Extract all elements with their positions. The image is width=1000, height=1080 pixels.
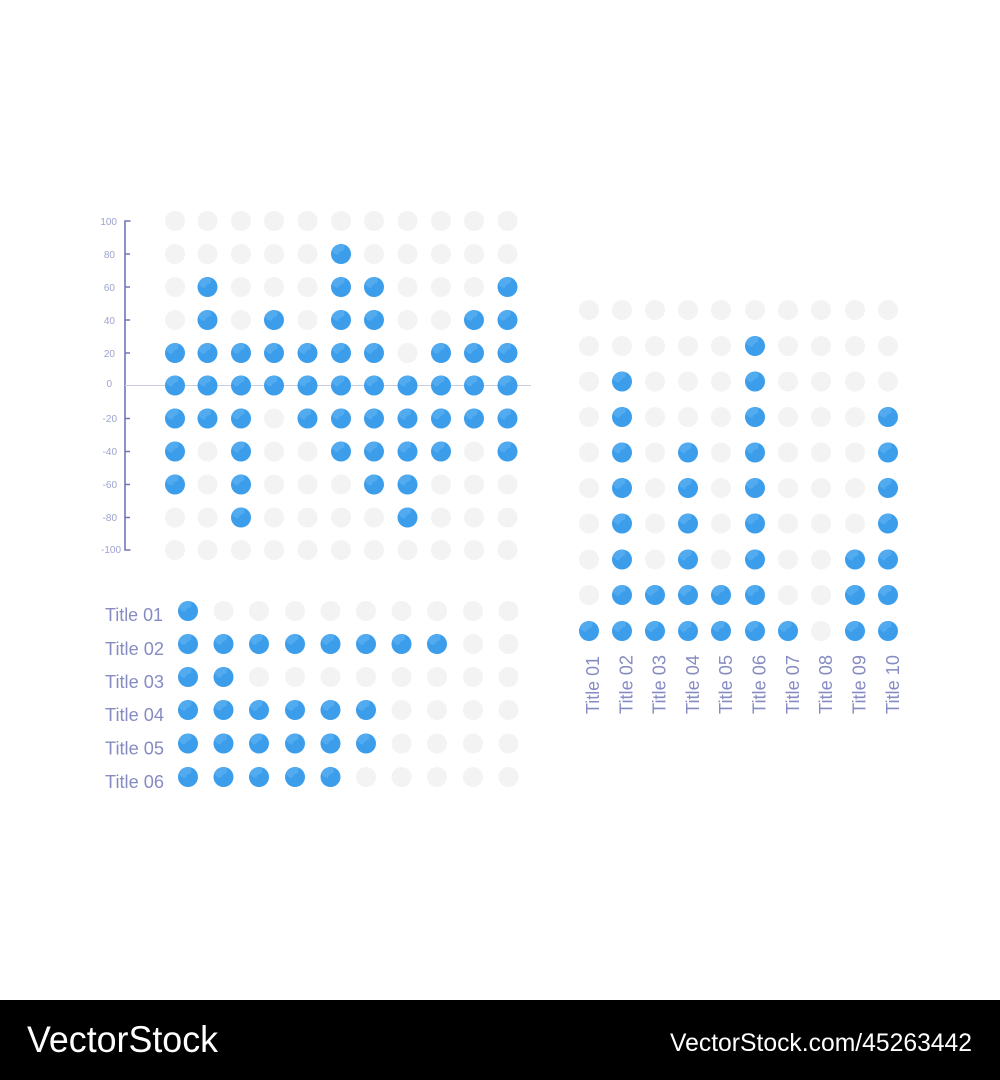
dots row 80 bbox=[165, 244, 518, 264]
footer: watermark bar: VectorStock bbox=[27, 1019, 218, 1060]
column: Title 03: Title 03 bbox=[650, 655, 670, 714]
row: Title 04: Title 04 bbox=[105, 705, 164, 725]
row: Title 06: Title 06 bbox=[105, 772, 164, 792]
value axis: 0 bbox=[106, 379, 112, 390]
dots row 40 bbox=[165, 310, 518, 330]
column: Title 05: Title 05 bbox=[716, 655, 736, 714]
column: Title 06: Title 06 bbox=[750, 655, 770, 714]
value axis bbox=[100, 217, 531, 556]
dots row 0 bbox=[165, 376, 518, 396]
footer: watermark bar bbox=[0, 1000, 1000, 1080]
value axis: -40 bbox=[103, 447, 117, 458]
row: Title 06 bbox=[105, 767, 518, 792]
value axis: -100 bbox=[101, 545, 121, 556]
column: Title 06 bbox=[745, 300, 770, 714]
value axis: 60 bbox=[104, 283, 115, 294]
dots row 100 bbox=[165, 211, 518, 231]
column: Title 02 bbox=[612, 300, 636, 714]
column: Title 08 bbox=[811, 300, 836, 714]
column: Title 07: Title 07 bbox=[783, 655, 803, 714]
row: Title 05 bbox=[105, 734, 518, 758]
value axis: 40 bbox=[104, 316, 115, 327]
column: Title 10 bbox=[878, 300, 903, 714]
row: Title 03 bbox=[105, 667, 518, 692]
dots row -20 bbox=[165, 408, 518, 428]
chart: diverging dot matrix with value axis bbox=[100, 211, 531, 560]
row: Title 01 bbox=[105, 601, 518, 625]
column: Title 09: Title 09 bbox=[850, 655, 870, 714]
row: Title 02: Title 02 bbox=[105, 639, 164, 659]
dots row -40 bbox=[165, 442, 518, 462]
value axis: -60 bbox=[103, 480, 117, 491]
row: Title 04 bbox=[105, 700, 518, 725]
column: Title 09 bbox=[845, 300, 870, 714]
dots row -80 bbox=[165, 508, 518, 528]
value axis: -20 bbox=[103, 414, 117, 425]
column: Title 01 bbox=[579, 300, 603, 714]
dots row -100 bbox=[165, 540, 518, 560]
dots row 20 bbox=[165, 343, 518, 363]
chart: horizontal dot rows bbox=[105, 601, 518, 792]
row: Title 05: Title 05 bbox=[105, 738, 164, 758]
column: Title 02: Title 02 bbox=[616, 655, 636, 714]
value axis: -80 bbox=[103, 513, 117, 524]
column: Title 07 bbox=[778, 300, 803, 714]
row: Title 03: Title 03 bbox=[105, 672, 164, 692]
column: Title 08: Title 08 bbox=[816, 655, 836, 714]
chart: vertical dot columns bbox=[579, 300, 903, 714]
dots row 60 bbox=[165, 277, 518, 297]
value axis: 20 bbox=[104, 349, 115, 360]
row: Title 02 bbox=[105, 634, 518, 659]
value axis: 100 bbox=[100, 217, 117, 228]
column: Title 10: Title 10 bbox=[883, 655, 903, 714]
column: Title 04 bbox=[678, 300, 703, 714]
footer: watermark bar: VectorStock.com/45263442 bbox=[670, 1029, 972, 1057]
dots row -60 bbox=[165, 474, 518, 494]
column: Title 01: Title 01 bbox=[583, 656, 603, 714]
column: Title 03 bbox=[645, 300, 670, 714]
column: Title 04: Title 04 bbox=[683, 655, 703, 714]
value axis: 80 bbox=[104, 250, 115, 261]
row: Title 01: Title 01 bbox=[105, 605, 163, 625]
column: Title 05 bbox=[711, 300, 736, 714]
